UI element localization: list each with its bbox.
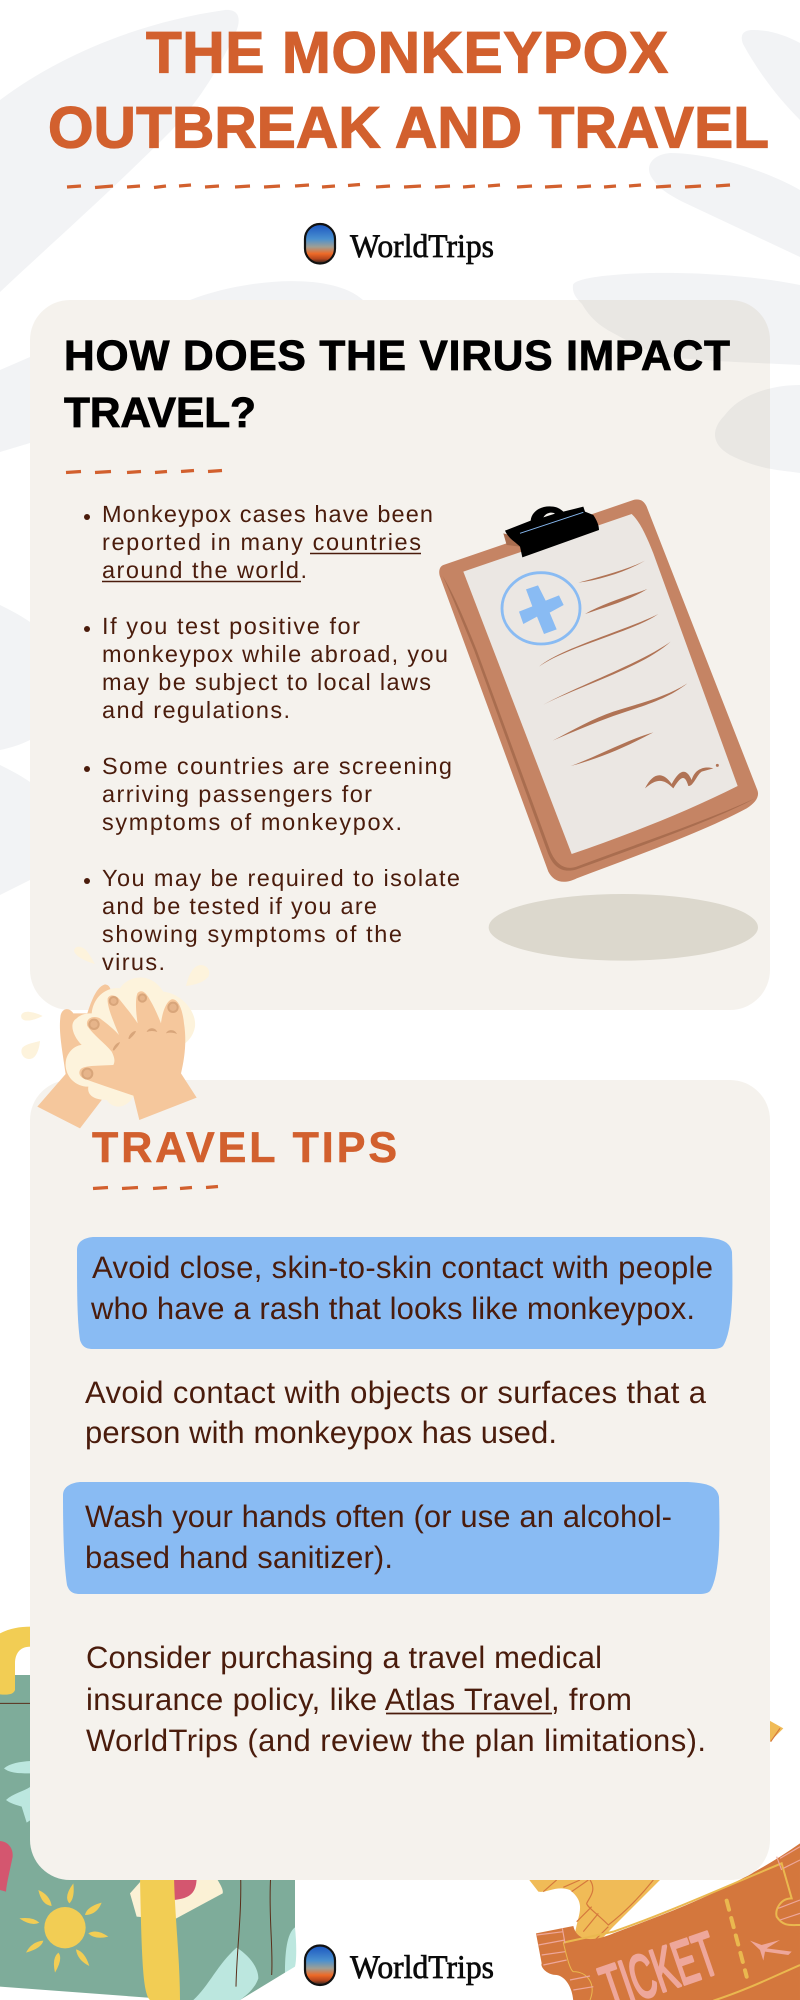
heading: how does the virus impact travel: TRAVEL? [64,390,256,437]
icon: airplane window [305,1946,335,1985]
title: THE MONKEYPOX [146,20,668,86]
tip: avoid skin contact [77,1237,732,1349]
fingernails and knuckles [82,994,178,1079]
illustration: hands washing [21,947,209,1128]
written lines and signature [539,561,719,788]
bullet: testing positive abroad: If you test positive for [102,613,360,639]
bullet: isolation and testing: virus. [102,949,165,975]
yellow ticket [527,1719,783,1948]
bullet: isolation and testing: You may be required to isolate [102,865,460,891]
heading: how does the virus impact travel [64,333,730,437]
tip: avoid skin contact: Avoid close, skin-to-skin contact with people [92,1250,713,1285]
bullet: screening of arriving passengers: symptoms of monkeypox. [102,809,402,835]
illustration: suitcase [0,1627,296,2000]
back hand [37,984,111,1128]
bullet: testing positive abroad: and regulations. [102,697,290,723]
tip: wash hands [63,1482,719,1594]
tip: wash hands: based hand sanitizer). [85,1540,393,1575]
panel: travel tips [30,1080,770,1880]
bullet: isolation and testing: showing symptoms of the [102,921,402,947]
panel: how does the virus impact travel [30,300,770,1010]
tip: wash hands: Wash your hands often (or use an alcohol- [85,1499,672,1534]
bullet: isolation and testing: and be tested if you are [102,893,377,919]
bullet: screening of arriving passengers: arriving passengers for [102,781,372,807]
logo: WorldTrips header [305,224,494,265]
heading: travel tips: TRAVEL TIPS [92,1124,397,1172]
tip: travel medical insurance: WorldTrips (and review the plan limitations). [86,1723,706,1758]
orange ticket [536,1843,800,2000]
bullet: countries reporting cases: around the world. [102,557,307,583]
bullet: countries reporting cases: Monkeypox cases have been [102,501,433,527]
icon: airplane window [305,224,335,264]
clipboard clip [503,506,599,557]
logo wordmark: WorldTrips [350,1950,494,1986]
tip: avoid used objects: person with monkeypox has used. [85,1415,557,1450]
bullet: countries reporting cases [84,501,433,583]
bullet: testing positive abroad: monkeypox while abroad, you [102,641,448,667]
soap splashes [21,947,209,1059]
title: OUTBREAK AND TRAVEL [48,96,769,160]
bullet: countries reporting cases: reported in many countries [102,529,421,555]
bullet: testing positive abroad: may be subject to local laws [102,669,431,695]
icon: medical cross [502,573,580,644]
clipboard board [439,499,758,882]
logo: WorldTrips footer [305,1946,494,1986]
tip: travel medical insurance: insurance policy, like Atlas Travel, from [86,1682,632,1717]
heading: how does the virus impact travel: HOW DOES THE VIRUS IMPACT [64,333,730,380]
bullet: isolation and testing [84,865,460,975]
icon: plane [750,1940,792,1961]
clipboard paper [463,514,738,854]
tip: travel medical insurance: Consider purchasing a travel medical [86,1640,602,1675]
bullet: testing positive abroad [84,613,448,723]
title [48,20,769,160]
front hand [79,991,197,1120]
tip: avoid used objects [85,1375,707,1450]
bullet: screening of arriving passengers: Some countries are screening [102,753,452,779]
tip: travel medical insurance [86,1640,706,1758]
clipboard shadow [489,894,758,961]
tip: avoid skin contact: who have a rash that looks like monkeypox. [90,1291,695,1326]
illustration: floating clipboard [439,499,758,961]
illustration: plane tickets [527,1719,800,2000]
bullet: screening of arriving passengers [84,753,452,835]
tip: avoid used objects: Avoid contact with objects or surfaces that a [85,1375,707,1410]
logo wordmark: WorldTrips [350,229,494,265]
soap foam [66,977,195,1107]
